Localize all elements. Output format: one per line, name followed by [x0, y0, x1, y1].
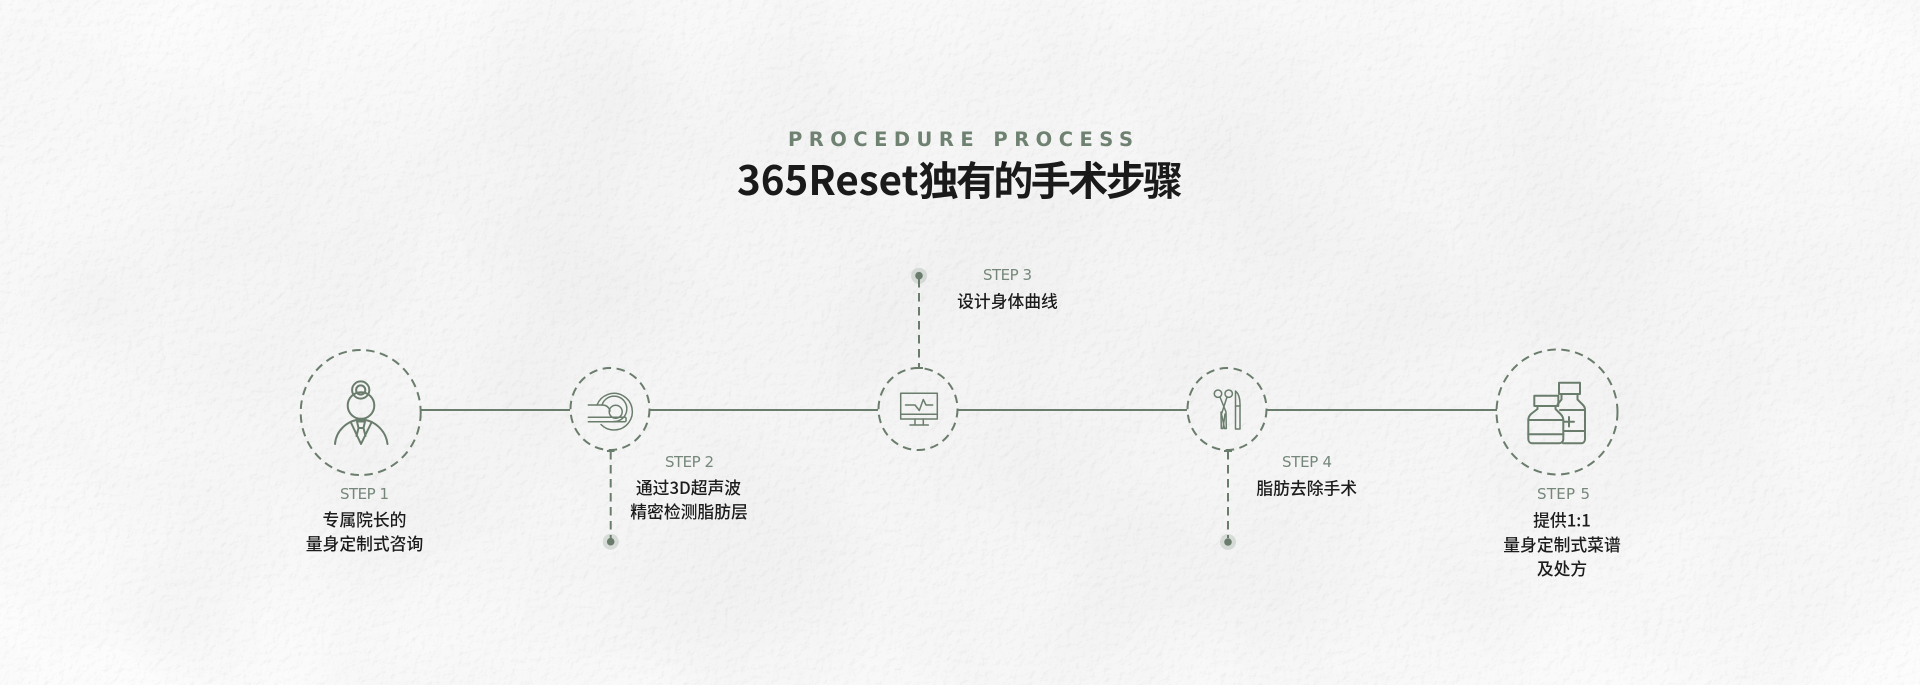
step 5 text: 量身定制式菜谱	[1503, 532, 1621, 556]
step 4 stem with dot	[1220, 451, 1236, 550]
step 2 text: 通过3D超声波	[636, 475, 741, 499]
step 2 text: STEP 2	[665, 453, 714, 471]
step 2 stem with dot	[603, 451, 619, 550]
title: 365Reset独有的手术步骤	[737, 148, 1182, 207]
step 2 text: 精密检测脂肪层	[630, 499, 748, 523]
step 1 text: 专属院长的	[323, 507, 406, 531]
step 3 text: STEP 3	[983, 266, 1032, 284]
step 1 text: STEP 1	[340, 485, 389, 503]
icon: surgical scissors and scalpel	[1214, 390, 1240, 429]
step 3 node	[878, 368, 958, 450]
step 4 node	[1188, 368, 1266, 450]
step 1 node	[301, 350, 421, 475]
step 4 text	[1256, 453, 1357, 500]
step 2 text	[630, 453, 748, 523]
step 5 text: STEP 5	[1537, 485, 1590, 503]
step 5 text	[1503, 485, 1621, 580]
step 3 text	[957, 266, 1058, 312]
timeline connector	[421, 409, 1497, 411]
step 5 node	[1496, 350, 1618, 474]
step 2 node	[570, 368, 650, 450]
eyebrow heading: PROCEDURE PROCESS	[788, 128, 1133, 151]
step 1 text: 量身定制式咨询	[306, 531, 423, 555]
step 3 stem with dot	[911, 268, 927, 368]
step 4 text: 脂肪去除手术	[1256, 476, 1357, 500]
icon: medicine bottles	[1528, 383, 1585, 443]
step 4 text: STEP 4	[1282, 453, 1332, 471]
step 1 text	[306, 485, 423, 555]
icon: doctor	[335, 381, 388, 444]
step 3 text: 设计身体曲线	[957, 288, 1058, 312]
step 5 text: 及处方	[1537, 556, 1587, 580]
step 5 text: 提供1:1	[1533, 508, 1591, 532]
icon: monitor	[901, 393, 937, 425]
icon: ultrasound scanner	[588, 393, 632, 430]
